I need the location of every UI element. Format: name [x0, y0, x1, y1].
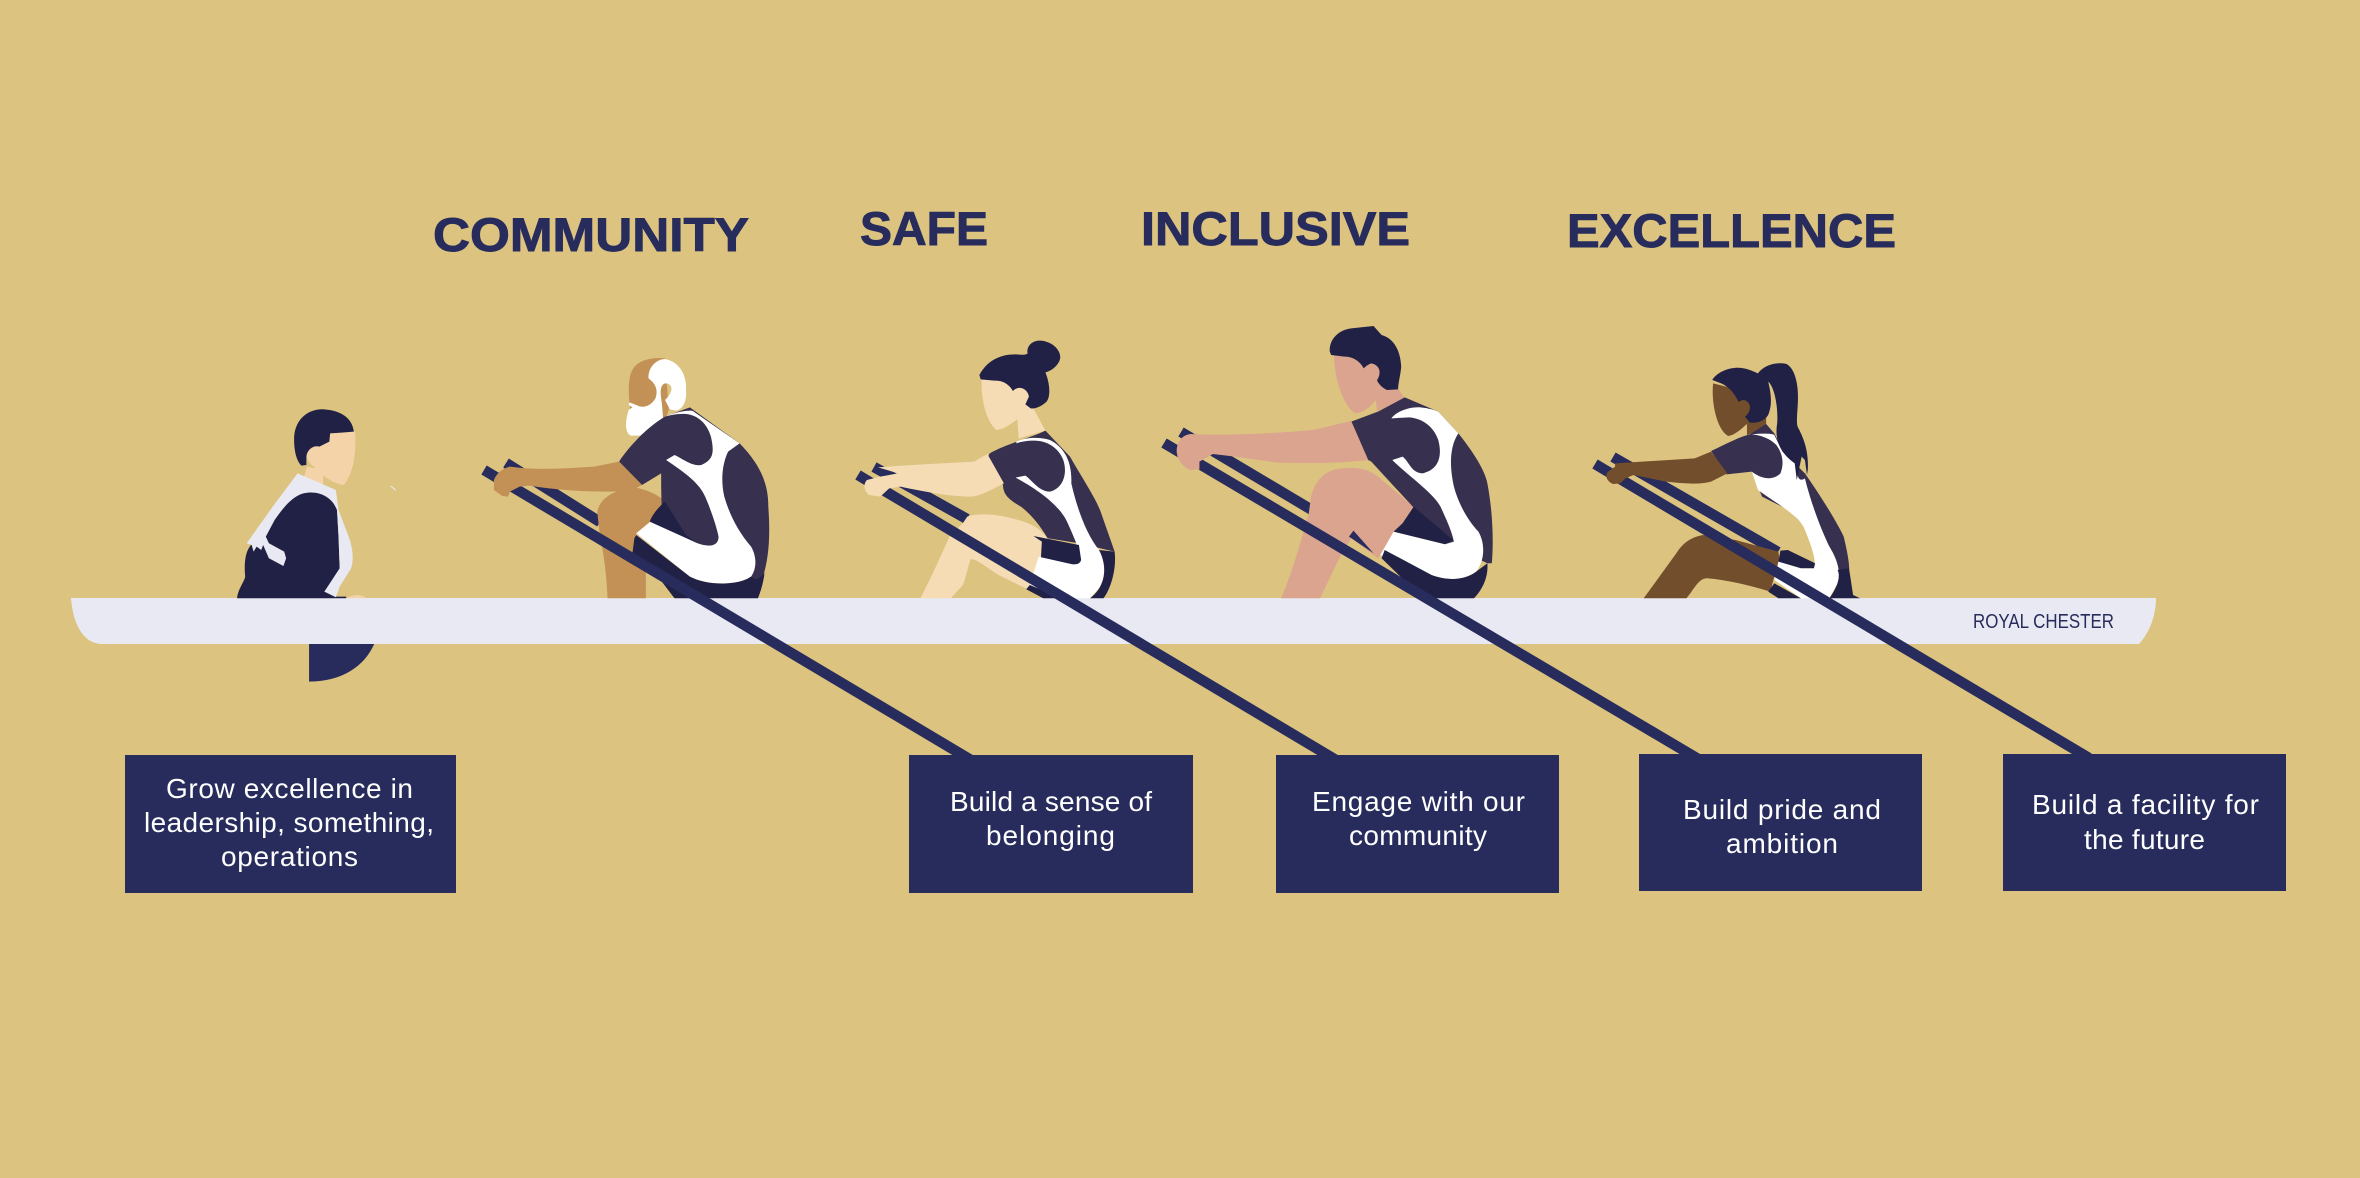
- callout: leadership goal: Grow excellence in: [166, 773, 413, 804]
- front oar: [484, 470, 971, 760]
- hull: [71, 598, 2156, 644]
- figure: rower 2 with oar: [858, 341, 1336, 760]
- back oar: [1181, 432, 1312, 510]
- arm: [494, 462, 642, 497]
- figure: rower 4 with oar: [1595, 363, 2089, 758]
- boat name: ROYAL CHESTER: [1973, 611, 2114, 633]
- callout: facility goal: [2003, 754, 2286, 891]
- figure: rower 1 with oar: [484, 358, 971, 760]
- callout: belonging goal: belonging: [986, 820, 1115, 851]
- back oar: [1613, 457, 1778, 552]
- figure: rower 3 with oar: [1164, 326, 1700, 760]
- callout: facility goal: Build a facility for: [2032, 789, 2259, 820]
- arm: [864, 454, 1004, 497]
- rowing boat hull: [71, 598, 2156, 682]
- figure: coxswain: [237, 409, 396, 598]
- callout: leadership goal: [125, 755, 456, 893]
- callout: community goal: [1276, 755, 1559, 893]
- callout: facility goal: the future: [2084, 824, 2205, 855]
- keel fin: [309, 643, 375, 682]
- back oar: [506, 463, 600, 522]
- heading: safe: SAFE: [860, 202, 988, 255]
- callout: leadership goal: leadership, something,: [144, 807, 434, 838]
- arm: [1177, 421, 1368, 470]
- callout: community goal: Engage with our: [1312, 786, 1525, 817]
- callout: pride goal: ambition: [1726, 828, 1838, 859]
- callout: pride goal: [1639, 754, 1922, 891]
- heading: inclusive: INCLUSIVE: [1141, 202, 1410, 255]
- arm: [1606, 452, 1727, 484]
- front oar: [1595, 464, 2089, 758]
- back oar: [874, 467, 967, 519]
- callout: pride goal: Build pride and: [1683, 794, 1881, 825]
- callout: leadership goal: operations: [221, 841, 358, 872]
- callout: community goal: community: [1349, 820, 1487, 851]
- front oar: [858, 475, 1336, 760]
- front oar: [1164, 443, 1700, 760]
- callout: belonging goal: Build a sense of: [950, 786, 1152, 817]
- heading: excellence: EXCELLENCE: [1567, 204, 1896, 257]
- heading: community: COMMUNITY: [433, 208, 749, 261]
- callout: belonging goal: [909, 755, 1193, 893]
